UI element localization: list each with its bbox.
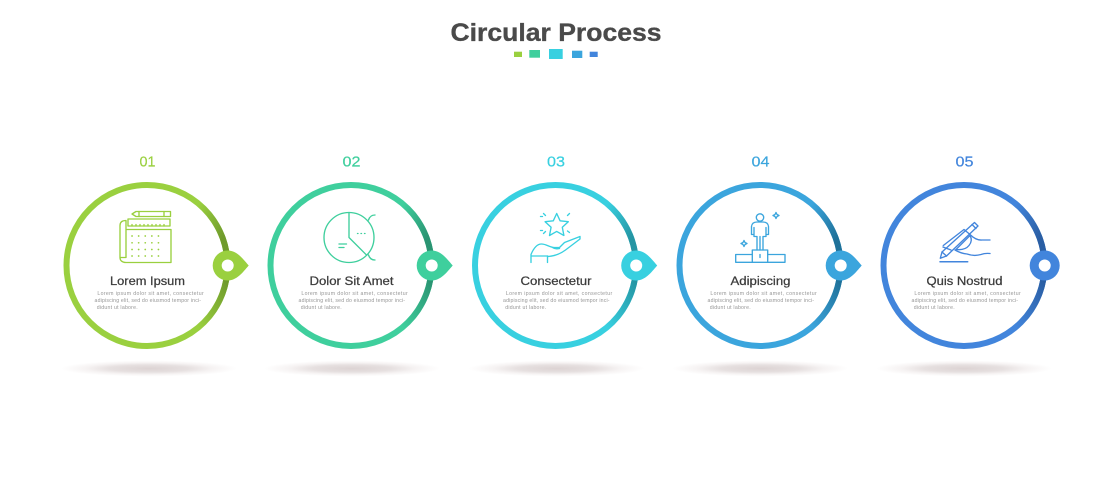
description: didunt ut labore. (505, 305, 546, 311)
connector pin (621, 250, 657, 280)
step number: 01 (140, 154, 156, 170)
description: didunt ut labore. (97, 305, 138, 311)
step number: 02 (342, 154, 360, 170)
shadow (876, 360, 1052, 376)
connector pin (417, 250, 453, 280)
connector pin (826, 250, 862, 280)
description (503, 291, 612, 311)
icon: pie chart (324, 212, 375, 262)
shadow (61, 360, 237, 376)
panel: step 04 (672, 154, 862, 376)
description: Lorem ipsum dolor sit amet, consectetur (710, 291, 817, 297)
panel: step 02 (264, 154, 453, 376)
description (708, 291, 817, 311)
description (94, 291, 204, 311)
ring shading (812, 204, 839, 327)
description: Lorem ipsum dolor sit amet, consectetur (97, 291, 204, 297)
heading: Adipiscing (730, 276, 790, 288)
description: adipiscing elit, sed do eiusmod tempor inci- (94, 298, 201, 304)
description: adipiscing elit, sed do eiusmod tempor inci- (708, 298, 814, 304)
description (298, 291, 408, 311)
icon: calendar and ruler (120, 212, 171, 262)
ring shading (1016, 204, 1043, 327)
title colour squares (514, 49, 598, 59)
description: adipiscing elit, sed do eiusmod tempor inci- (298, 298, 405, 304)
description: Lorem ipsum dolor sit amet, consectetur (914, 291, 1021, 297)
title: Circular Process (450, 19, 662, 47)
step number: 04 (752, 154, 770, 170)
ring shading (607, 204, 635, 327)
heading: Consectetur (520, 276, 592, 288)
panel: step 01 (61, 154, 249, 376)
description (912, 291, 1021, 311)
panel: step 05 (876, 154, 1060, 376)
shadow (264, 360, 440, 376)
ring (680, 185, 840, 346)
ring (66, 185, 228, 346)
description: Lorem ipsum dolor sit amet, consectetur (506, 291, 612, 297)
shadow (672, 360, 848, 376)
connector pin (1030, 250, 1060, 280)
connector pin (213, 250, 249, 280)
ring shading (403, 204, 430, 327)
heading: Dolor Sit Amet (310, 276, 394, 288)
shadow (468, 360, 644, 376)
description: didunt ut labore. (914, 305, 955, 311)
description: adipiscing elit, sed do eiusmod tempor inci- (503, 298, 610, 304)
icon: hand with star (531, 214, 580, 262)
step number: 03 (547, 154, 565, 170)
heading: Quis Nostrud (926, 276, 1002, 288)
ring (270, 185, 432, 346)
description: Lorem ipsum dolor sit amet, consectetur (301, 291, 408, 297)
step number: 05 (956, 154, 974, 170)
description: didunt ut labore. (710, 305, 751, 311)
ring (475, 185, 636, 346)
description: adipiscing elit, sed do eiusmod tempor inci- (912, 298, 1018, 304)
heading: Lorem Ipsum (110, 276, 185, 288)
ring shading (199, 204, 226, 327)
icon: hand writing (940, 222, 990, 262)
panel: step 03 (468, 154, 657, 376)
description: didunt ut labore. (301, 305, 342, 311)
icon: person on podium (736, 212, 785, 262)
ring (884, 185, 1044, 346)
